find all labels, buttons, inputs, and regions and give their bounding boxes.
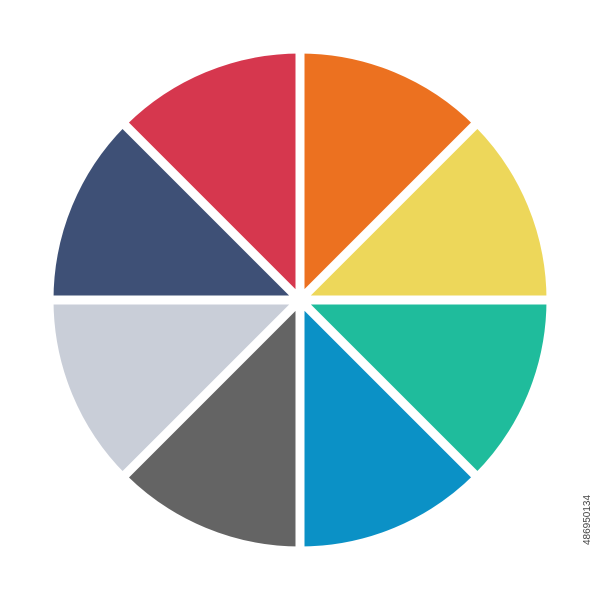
slice: red <box>123 49 300 300</box>
slice: blue <box>300 300 477 551</box>
watermark id text: 486950134 <box>582 495 593 545</box>
slice: yellow <box>300 123 551 300</box>
slice: light gray <box>49 300 300 477</box>
slice: orange (top right) <box>300 49 477 300</box>
slice: navy <box>49 123 300 300</box>
slice: dark gray <box>123 300 300 551</box>
slice: teal <box>300 300 551 477</box>
